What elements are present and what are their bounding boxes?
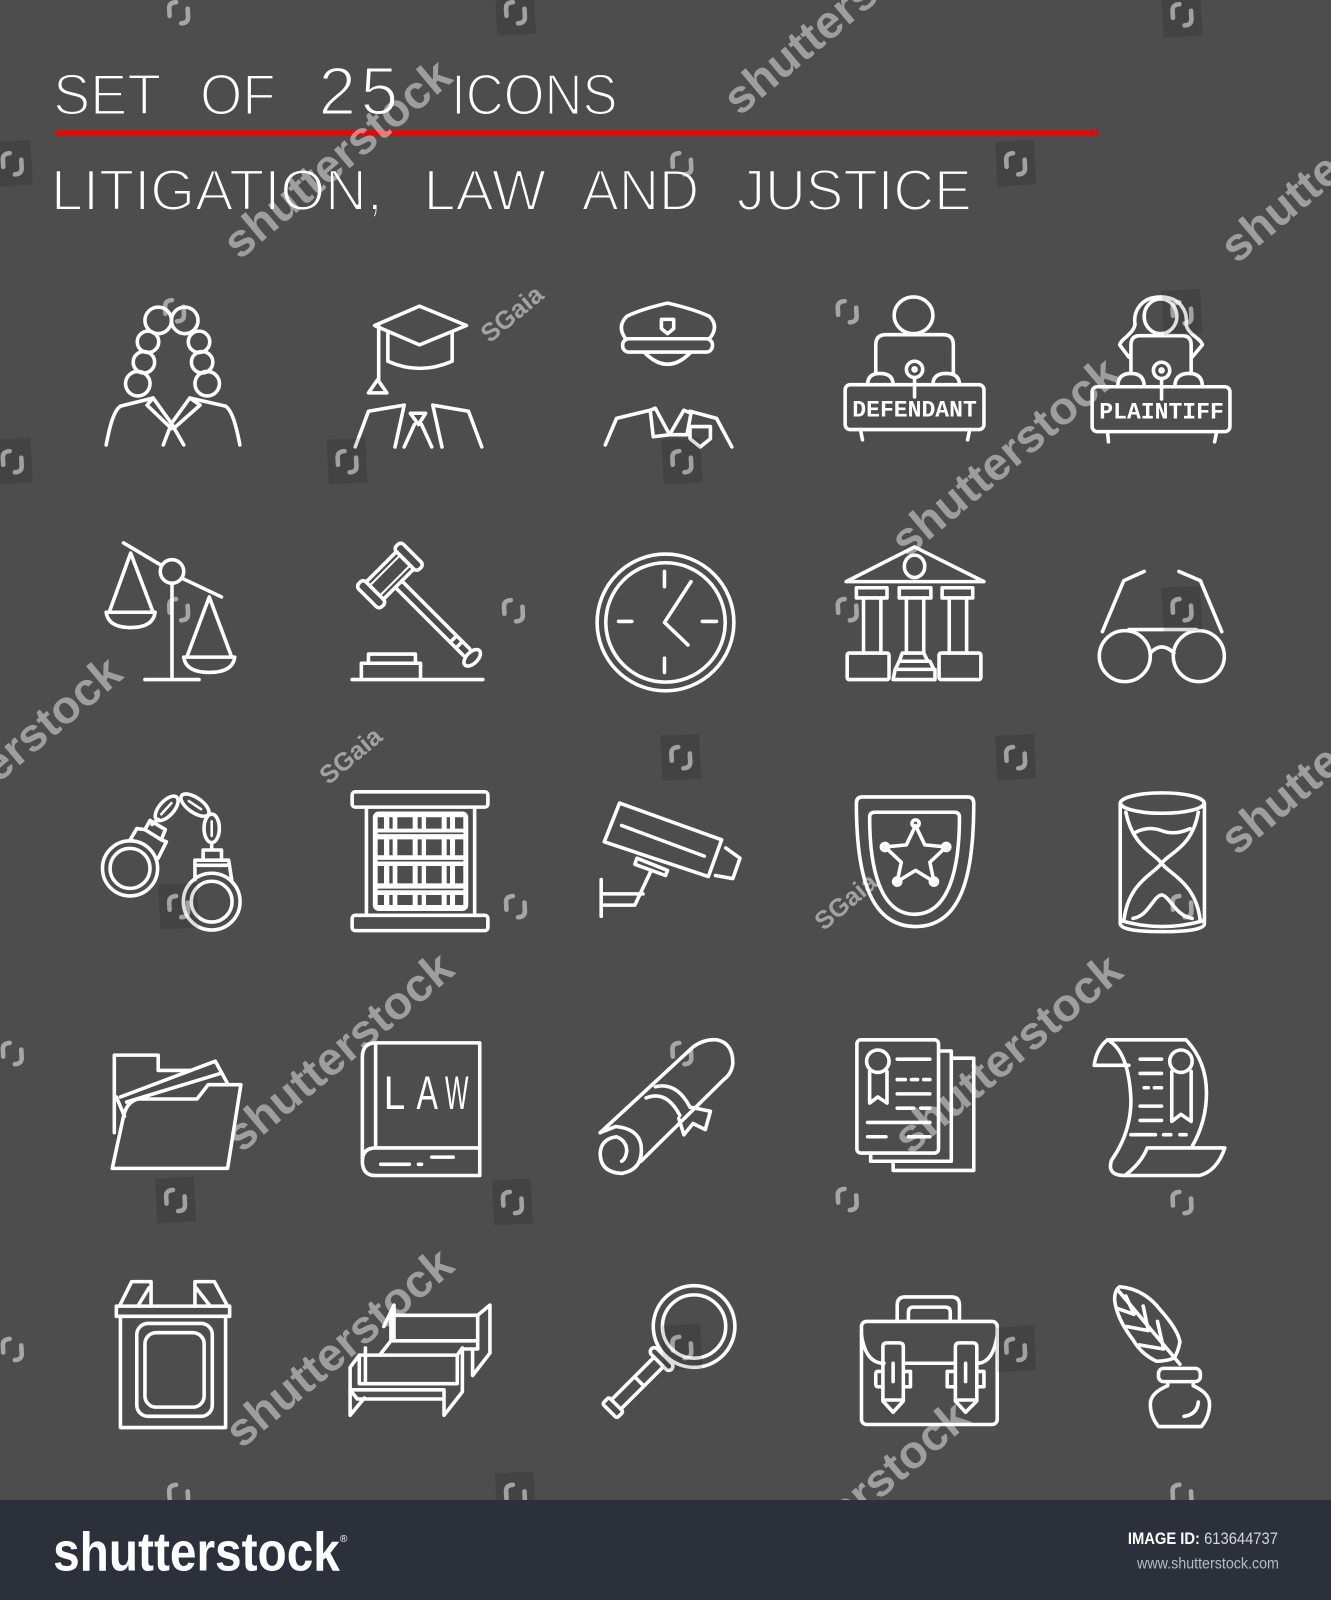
title: set of 25 icons: ICONS xyxy=(451,63,618,127)
icon: police cap and uniform xyxy=(605,303,732,447)
watermarks: photographer name: SGaia xyxy=(476,280,550,348)
icon: gavel xyxy=(352,542,499,684)
title: set of 25 icons: SET xyxy=(53,63,161,127)
website: www.shutterstock.com xyxy=(1136,1555,1279,1572)
icon: law book: A xyxy=(416,1067,438,1119)
icon: defendant at desk xyxy=(845,297,984,440)
footer bar xyxy=(0,1500,1331,1600)
red underline xyxy=(55,131,1098,136)
icon: plaintiff at desk xyxy=(1092,297,1230,442)
icon: documents with seal xyxy=(857,1040,974,1170)
icon: surveillance camera xyxy=(601,803,740,916)
icon: graduation cap and gown xyxy=(355,306,482,447)
subtitle: litigation, law and justice: LITIGATION, xyxy=(51,159,383,223)
icon: parchment scroll xyxy=(1094,1040,1225,1176)
title: set of 25 icons xyxy=(53,54,618,129)
watermarks: shutterstock: shutterstock xyxy=(883,943,1132,1163)
icon: law book xyxy=(362,1043,480,1176)
subtitle: litigation, law and justice: JUSTICE xyxy=(737,159,972,223)
icon: judge wig xyxy=(106,307,240,445)
icon: briefcase xyxy=(861,1297,997,1424)
icon: law book: W xyxy=(445,1067,469,1119)
icon: scales of justice xyxy=(106,543,235,680)
icon: open folder xyxy=(112,1055,241,1168)
icon: hourglass xyxy=(1120,793,1204,932)
subtitle: litigation, law and justice: AND xyxy=(582,159,699,223)
icon: glasses xyxy=(1099,571,1224,682)
icon: courthouse xyxy=(846,547,984,680)
icon: diploma scroll xyxy=(600,1040,733,1173)
icon: handcuffs xyxy=(102,790,240,930)
footer logo: shutterstock xyxy=(53,1520,340,1582)
watermarks: photographer name: SGaia xyxy=(809,868,883,936)
icon: police shield xyxy=(856,797,974,927)
icon: defendant at desk: DEFENDANT xyxy=(852,397,977,424)
icon: magnifying glass xyxy=(600,1286,735,1421)
icon: courtroom benches xyxy=(350,1305,490,1415)
icon: plaintiff at desk: PLAINTIFF xyxy=(1099,399,1224,426)
icon: barred window xyxy=(352,792,488,931)
watermarks: photographer name: SGaia xyxy=(314,722,388,790)
watermarks: shutterstock: shutterstock xyxy=(215,941,463,1161)
title: set of 25 icons: 25 xyxy=(318,54,398,129)
icon: clock xyxy=(597,554,734,691)
image id: IMAGE ID: 613644737 xyxy=(1128,1530,1278,1548)
subtitle: litigation, law and justice xyxy=(51,159,972,223)
watermarks: photographer name xyxy=(314,280,883,936)
registered mark: ® xyxy=(340,1534,348,1545)
watermarks: shutterstock: shutterstock xyxy=(880,346,1129,566)
icon: law book: L xyxy=(384,1067,405,1119)
title: set of 25 icons: OF xyxy=(200,63,276,127)
watermarks: shutterstock: shutterstock xyxy=(215,1237,463,1457)
icon: podium frame xyxy=(116,1282,230,1428)
subtitle: litigation, law and justice: LAW xyxy=(424,159,546,223)
icon: quill and inkwell xyxy=(1115,1287,1210,1427)
watermarks: shutterstock: shutterstock xyxy=(213,48,461,268)
